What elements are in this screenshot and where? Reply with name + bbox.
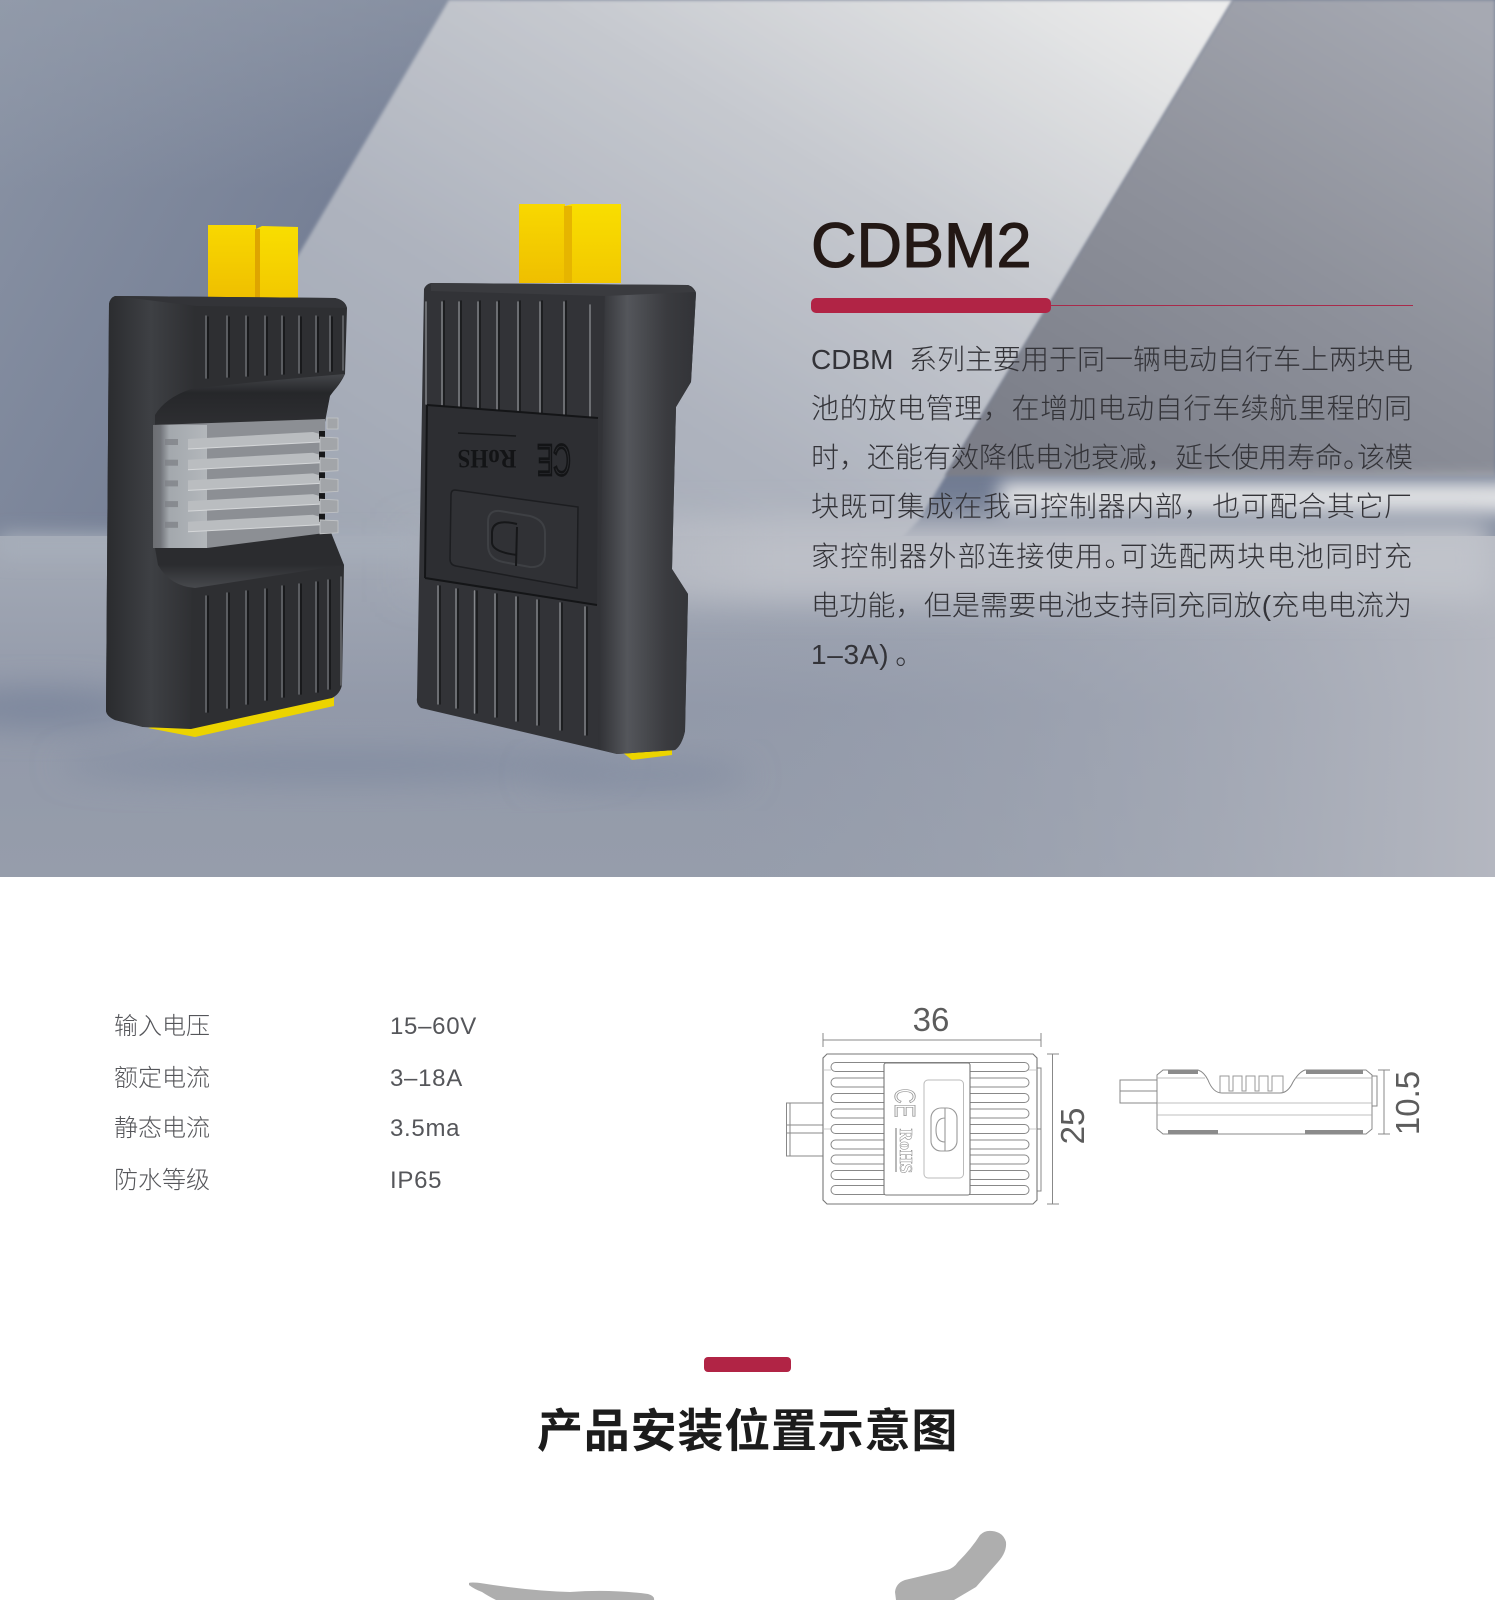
spec list	[114, 1013, 477, 1194]
dimension drawing: side view	[1120, 1070, 1426, 1135]
tab	[1372, 1076, 1377, 1106]
spec list: 防水等级	[114, 1167, 210, 1194]
device 2: label side	[417, 204, 696, 760]
body 2	[417, 283, 696, 754]
yellow base 1	[148, 696, 334, 737]
section heading: 产品安装位置示意图	[537, 1405, 958, 1457]
center plate	[884, 1063, 970, 1195]
embossed CE mark: CE	[537, 435, 571, 483]
spec list: 输入电压	[114, 1013, 210, 1040]
title: CDBM2	[811, 211, 1032, 281]
body 1	[106, 296, 347, 729]
dimension 25: 25	[1054, 1108, 1090, 1144]
logo	[488, 511, 545, 567]
handlebar	[895, 1531, 1006, 1600]
spec list: 15–60V	[390, 1013, 477, 1040]
yellow base 2	[622, 748, 672, 760]
device 1: heat sink side	[106, 225, 347, 737]
title underline	[811, 298, 1413, 313]
label plate	[425, 405, 598, 605]
connector 1	[208, 225, 298, 298]
connector	[786, 1103, 824, 1156]
recess above and below the heat sink	[155, 374, 345, 428]
product description paragraph: CDBM 系列主要用于同一辆电动自行车上两块电	[811, 344, 1413, 375]
product description paragraph: 时，还能有效降低电池衰减，延长使用寿命。该模	[811, 442, 1413, 473]
dark pads	[1168, 1070, 1363, 1134]
embossed RoHS mark: RoHS	[458, 443, 516, 472]
bottom ribs 1	[206, 577, 341, 712]
dimension 10.5: 10.5	[1389, 1071, 1426, 1135]
product description paragraph: 块既可集成在我司控制器内部，也可配合其它厂	[811, 491, 1412, 522]
section marker	[704, 1357, 791, 1372]
saddle	[469, 1582, 654, 1600]
ribs	[831, 1062, 1029, 1194]
logo recess	[450, 490, 578, 588]
heat sink	[153, 418, 338, 548]
spec list: 3–18A	[390, 1065, 463, 1092]
bottom ribs 2	[438, 586, 585, 735]
RoHS mark: RoHS	[896, 1129, 916, 1173]
spec list: 静态电流	[114, 1115, 210, 1142]
side tabs	[1037, 1068, 1041, 1191]
top ribs 2	[426, 302, 590, 417]
product description paragraph: 1–3A)。	[811, 639, 924, 670]
spec list: 额定电流	[114, 1065, 210, 1092]
dimension drawing: top view	[786, 1001, 1090, 1204]
product description paragraph	[811, 344, 1413, 670]
CE mark: CE	[888, 1088, 920, 1118]
dimension 36: 36	[913, 1001, 949, 1038]
body	[823, 1054, 1037, 1204]
product description paragraph: 电功能，但是需要电池支持同充同放(充电电流为	[811, 590, 1412, 621]
connector 2	[519, 204, 621, 283]
body	[1157, 1070, 1372, 1134]
installation illustration: grey bicycle parts	[469, 1530, 1006, 1600]
panel: hero product image	[0, 0, 1495, 877]
dimension 36	[823, 1001, 1041, 1047]
product description paragraph: 家控制器外部连接使用。可选配两块电池同时充	[811, 541, 1412, 572]
top ribs 1	[206, 316, 343, 378]
spec list: 3.5ma	[390, 1115, 460, 1142]
product description paragraph: 池的放电管理，在增加电动自行车续航里程的同	[811, 393, 1412, 424]
vent comb	[1220, 1076, 1283, 1093]
logo	[931, 1108, 957, 1151]
spec list: IP65	[390, 1167, 442, 1194]
dimension 25	[1047, 1054, 1091, 1204]
connector	[1120, 1080, 1158, 1103]
wall and floor background	[0, 0, 1495, 877]
